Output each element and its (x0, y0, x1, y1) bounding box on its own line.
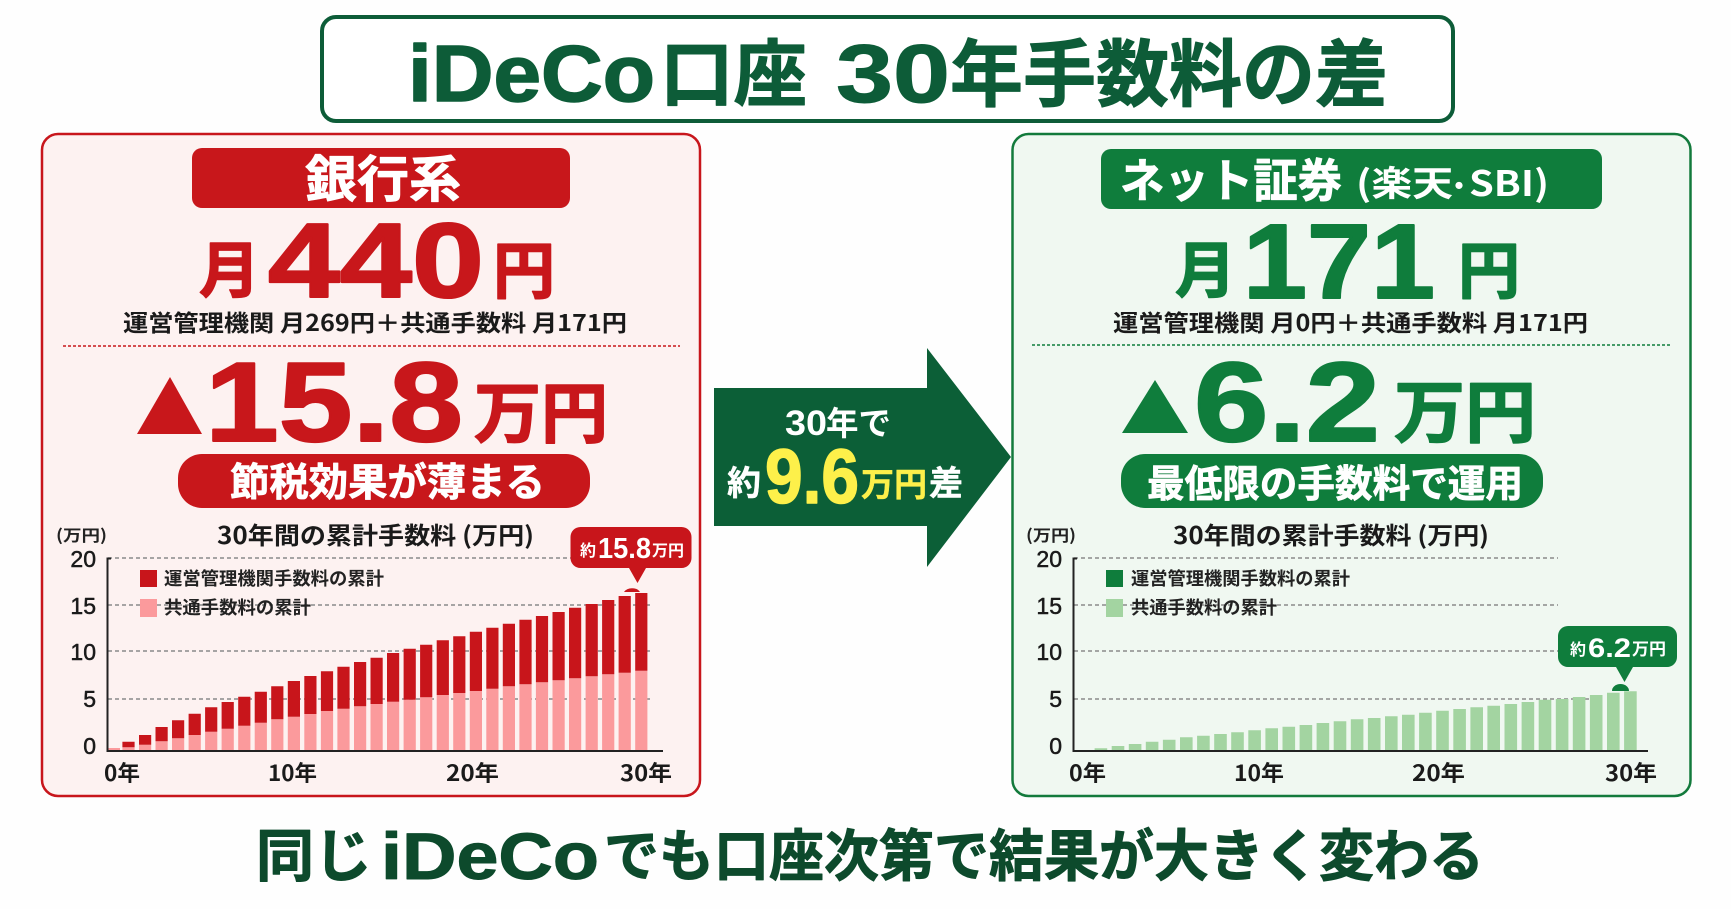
callout (570, 527, 692, 592)
net pill: 最低限の手数料で運用 (1147, 453, 1523, 508)
legend: 運営管理機関手数料の累計 (164, 565, 384, 591)
bank pill: 節税効果が薄まる (230, 452, 545, 508)
title (322, 16, 1453, 122)
x axis labels: 30年 (1605, 756, 1657, 788)
bank chart (56, 516, 692, 788)
legend: 共通手数料の累計 (1131, 594, 1277, 620)
bars: admin fee (122, 593, 647, 747)
bank badge: 銀行系 (305, 140, 461, 212)
bars: common fee (107, 671, 647, 751)
bank 30-year total: 15.8 (205, 339, 463, 465)
legend (1106, 565, 1350, 620)
bank 30-year total: 万円 (474, 361, 608, 457)
x axis labels: 30年 (620, 756, 672, 788)
legend (140, 565, 384, 620)
y axis labels (1036, 546, 1062, 759)
callout: 6.2 (1588, 633, 1631, 663)
bank monthly fee (199, 202, 555, 320)
y axis labels: 15 (1036, 593, 1062, 619)
callout: 万円 (652, 537, 684, 561)
net monthly fee: 円 (1458, 221, 1520, 311)
net 30-year total: 6.2 (1194, 339, 1380, 465)
y axis labels: 0 (83, 733, 96, 759)
net badge: ネット証券 (1120, 145, 1342, 211)
title: 年手数料の差 (950, 16, 1388, 122)
callout: 約 (1570, 636, 1586, 660)
bank 30-year total (137, 339, 608, 465)
y axis labels: 15 (70, 593, 96, 619)
conclusion: iDeCo (381, 819, 599, 893)
bank chart: 30年間の累計手数料 (万円) (217, 516, 534, 551)
arrow: 約 (727, 456, 761, 505)
bank badge (192, 140, 570, 212)
y axis labels: 20 (1036, 546, 1062, 572)
net fee breakdown: 運営管理機関 月0円＋共通手数料 月171円 (1113, 304, 1588, 338)
title: 口座 (660, 16, 807, 122)
panel: bank (42, 134, 700, 796)
arrow: 差 (929, 456, 963, 505)
bank fee breakdown: 運営管理機関 月269円＋共通手数料 月171円 (123, 304, 627, 338)
net monthly fee: 月 (1175, 221, 1236, 310)
net chart (1026, 516, 1677, 788)
bank monthly fee: 月 (199, 221, 260, 310)
y axis labels: 0 (1049, 733, 1062, 759)
title: iDeCo (408, 29, 655, 118)
y axis labels: 10 (70, 639, 96, 665)
conclusion (256, 811, 1484, 893)
y axis labels (70, 546, 96, 759)
bank chart: (万円) (56, 522, 107, 546)
y axis labels: 5 (1049, 686, 1062, 712)
callout: 15.8 (598, 533, 651, 565)
net badge (1101, 145, 1602, 211)
net chart: 30年間の累計手数料 (万円) (1173, 516, 1489, 551)
x axis labels: 20年 (1412, 756, 1465, 788)
net 30-year total (1122, 339, 1536, 465)
net chart: (万円) (1026, 522, 1076, 546)
arrow: 30 (785, 404, 827, 443)
x axis labels (104, 756, 672, 788)
net badge: (楽天 (1356, 156, 1453, 207)
conclusion: 同じ (256, 811, 372, 893)
net monthly fee (1175, 203, 1520, 321)
arrow: 年で (826, 397, 891, 445)
conclusion: でも口座次第で結果が大きく変わる (604, 812, 1484, 893)
y axis labels: 20 (70, 546, 96, 572)
arrow (714, 348, 1011, 567)
title: 30 (836, 27, 950, 120)
bank monthly fee: 円 (493, 221, 555, 311)
arrow: 9.6 (765, 434, 859, 520)
y axis labels: 5 (83, 686, 96, 712)
panel: net securities (1012, 134, 1690, 796)
bars: common fee (1095, 691, 1637, 751)
y axis labels: 10 (1036, 639, 1062, 665)
x axis labels: 20年 (446, 756, 499, 788)
callout: 約 (580, 537, 596, 561)
legend: 運営管理機関手数料の累計 (1131, 565, 1350, 591)
x axis labels: 10年 (268, 756, 317, 788)
x axis labels: 0年 (104, 756, 140, 788)
callout: 万円 (1632, 635, 1666, 660)
bank monthly fee: 440 (268, 202, 484, 320)
x axis labels: 0年 (1069, 756, 1106, 788)
net 30-year total: 万円 (1394, 358, 1536, 457)
x axis labels (1069, 756, 1657, 788)
legend: 共通手数料の累計 (164, 594, 311, 620)
x axis labels: 10年 (1234, 756, 1284, 788)
callout (1558, 626, 1677, 691)
net badge: ・ (1445, 165, 1473, 205)
net monthly fee: 171 (1243, 203, 1435, 321)
net badge: SBI) (1469, 156, 1549, 207)
arrow: 万円 (861, 458, 927, 506)
